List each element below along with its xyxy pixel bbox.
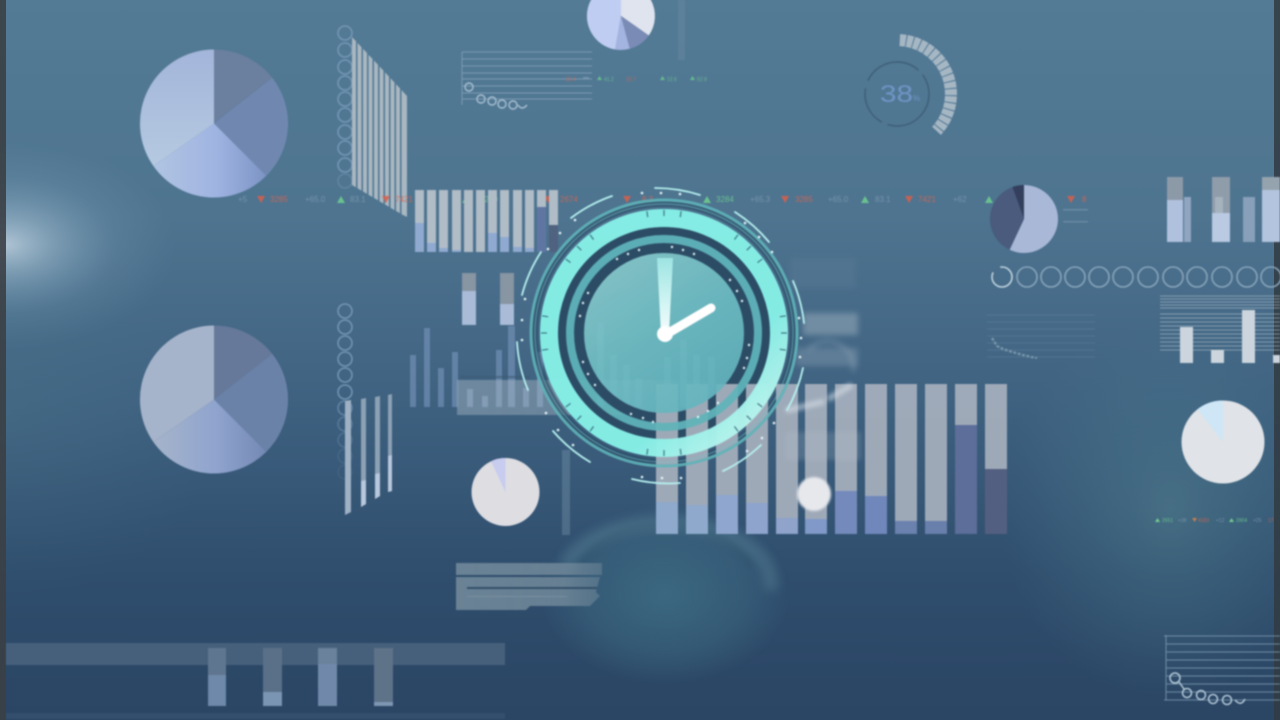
half pie chart: right — [990, 185, 1088, 253]
pie chart: lower left — [140, 325, 288, 474]
small ticker row: top: 12.6 — [667, 77, 677, 83]
glowing arc below the clock — [540, 505, 790, 685]
ticker row: centre: 3284 — [998, 195, 1016, 204]
large bar chart: lower centre — [656, 384, 1007, 534]
small ticker row: lower right: 3904 — [1236, 518, 1247, 524]
ticker row: centre: 8 — [1082, 195, 1087, 204]
line chart: top centre — [462, 52, 592, 109]
gauge: 38 percent: % — [913, 94, 920, 103]
clock shadow rings — [535, 204, 793, 462]
text lines with bars: right — [1160, 296, 1280, 363]
small ticker row: lower right: 2651 — [1162, 518, 1173, 524]
clock: outer dots — [521, 192, 802, 479]
ticker row: centre: 3285 — [795, 195, 813, 204]
bottom band with bars — [6, 643, 505, 719]
checker column: top — [678, 0, 685, 60]
perspective bar chart: top — [352, 37, 407, 217]
ticker row: centre — [238, 195, 1087, 204]
small ticker row: top — [566, 76, 707, 83]
bar chart: upper centre — [415, 190, 558, 252]
stacked bars: top right — [1167, 177, 1280, 242]
ticker row: centre: 83.1 — [875, 195, 891, 204]
bar chart: middle, faint — [410, 323, 715, 407]
ticker row: centre: +65.3 — [750, 195, 771, 204]
pie chart: right — [1182, 400, 1264, 484]
small ghost lines: right of clock — [790, 258, 858, 372]
small ticker row: lower right: +25 — [1253, 518, 1262, 524]
ticker row: centre: 3284 — [716, 195, 734, 204]
clock ghost strokes — [786, 386, 861, 460]
ticker row: centre: +62 — [953, 195, 967, 204]
pie chart: top centre — [587, 0, 655, 50]
clock: inner teal ring — [570, 239, 758, 427]
small ticker row: lower right: 17 — [1268, 518, 1274, 524]
small ticker row: lower right: 4183 — [1198, 518, 1209, 524]
checker column: below clock — [562, 450, 570, 535]
perspective thin bars: lower left — [345, 394, 392, 515]
clock: inner dots — [579, 246, 750, 423]
ticker row: centre: 3285 — [270, 195, 288, 204]
text band: behind clock — [457, 376, 717, 415]
small ticker row: top: 41.2 — [604, 77, 614, 83]
gauge: 38 percent: 38 — [880, 81, 913, 108]
ring row: right — [992, 267, 1280, 287]
small ticker row: top: 33.7 — [626, 77, 636, 83]
small ticker row: top: 52.9 — [697, 77, 707, 83]
clock: segmented outer arcs — [517, 188, 804, 483]
ticker row: centre: +65.0 — [828, 195, 849, 204]
clock: face — [584, 253, 744, 413]
pie chart: upper left — [140, 49, 288, 198]
ticker row: centre: 2674 — [560, 195, 578, 204]
small ticker row: top: 82.4 — [566, 77, 576, 83]
ticker row: centre: 7421 — [918, 195, 936, 204]
small ticker row: lower right: +38 — [1178, 518, 1187, 524]
faint line chart: right of centre — [987, 315, 1095, 358]
ticker row: centre: 3250 — [480, 195, 498, 204]
bright dot — [797, 477, 831, 511]
clock: hub — [657, 326, 673, 342]
clock: hour hand — [665, 308, 711, 335]
pie chart: small lower centre — [472, 458, 540, 526]
ticker row: centre: 7421 — [395, 195, 413, 204]
line chart: bottom right — [1164, 635, 1280, 704]
clock: outer thin rings — [531, 200, 797, 466]
circle chain: upper — [338, 26, 352, 188]
small ticker row: lower right — [1155, 518, 1274, 524]
stacked bars: centre — [462, 273, 514, 325]
text block: bottom centre — [456, 563, 602, 610]
clock: tick clusters — [541, 210, 787, 456]
ticker row: centre: +65.0 — [305, 195, 326, 204]
clock — [517, 188, 804, 483]
clock: minute hand — [657, 258, 673, 335]
gauge: 38 percent — [865, 40, 951, 131]
small ticker row: lower right: +12 — [1216, 518, 1225, 524]
ticker row: centre: +5 — [238, 195, 248, 204]
circle chain: lower — [338, 304, 352, 479]
ticker row: centre: 8.3 — [642, 195, 654, 204]
clock: bright ring — [549, 218, 779, 448]
ticker row: centre: 83.1 — [350, 195, 366, 204]
